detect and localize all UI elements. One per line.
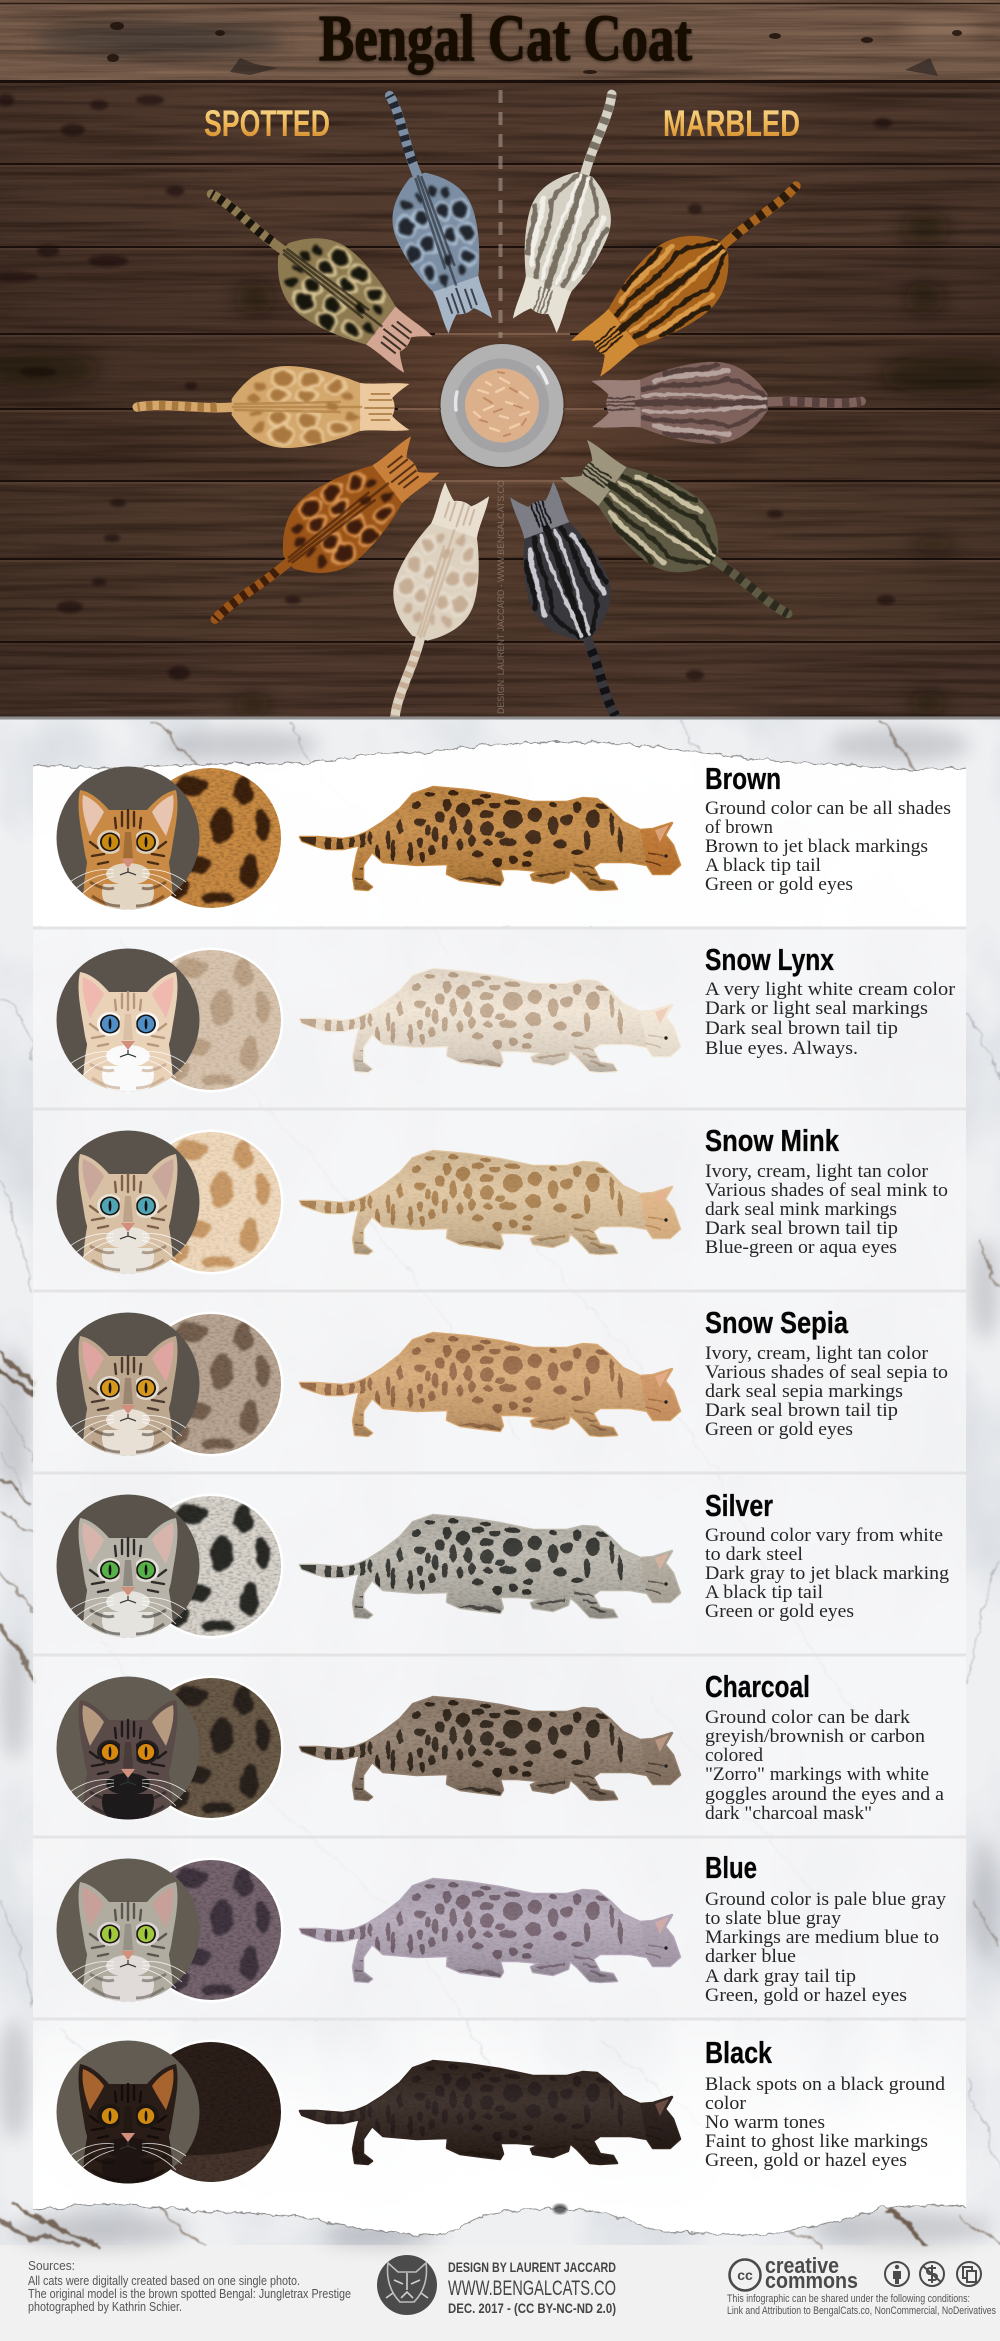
text block: design credit: DESIGN BY LAURENT JACCARD [448,2259,616,2275]
description: Snow Sepia: Various shades of seal sepia to [705,1363,948,1383]
panel: marble background [0,718,1000,2248]
description: Snow Lynx: Dark or light seal markings [705,999,928,1019]
heading: Black: Black [705,2035,773,2070]
panel: Blue coat [56,1850,947,2010]
text block: sources: Sources: [28,2259,75,2273]
description: Blue: to slate blue gray [705,1909,842,1929]
description: Snow Sepia: Dark seal brown tail tip [705,1401,898,1421]
icon: no derivatives [957,2262,981,2286]
description: Charcoal: greyish/brownish or carbon [705,1727,925,1747]
panel: Snow Mink coat [56,1123,948,1282]
cat: top view snow spotted [356,473,507,729]
panel: Silver coat [56,1488,949,1646]
panel: title plank [0,0,1000,82]
portrait: snow mink cat [56,1130,200,1282]
logo: creative commons: commons [765,2268,858,2293]
description: Charcoal: Ground color can be dark [705,1708,911,1728]
description: Charcoal: goggles around the eyes and a [705,1785,944,1805]
text block: license [727,2293,996,2317]
panel: wood table background [0,82,1000,718]
cat: top view snow marbled [495,81,651,342]
panel: Black coat [56,2035,946,2192]
description: Brown: Brown to jet black markings [705,837,928,857]
heading: Charcoal: Charcoal [705,1669,810,1704]
panel: Charcoal coat [56,1669,944,1828]
cat: snow mink side view [295,1147,685,1259]
cat: top view silver spotted [351,82,510,343]
swatch: snow sepia fur [169,1312,284,1456]
icon: noncommercial [920,2262,944,2286]
description: Black: Green, gold or hazel eyes [705,2151,907,2171]
description: Snow Mink: Various shades of seal mink to [705,1181,948,1201]
description: Silver: to dark steel [705,1545,803,1565]
heading: Blue: Blue [705,1850,757,1885]
description: Black: Black spots on a black ground [705,2075,946,2095]
cat: top view mauve marbled [587,360,861,445]
heading: Snow Sepia: Snow Sepia [705,1305,849,1340]
panel: paper sheet [25,742,975,2235]
description: Silver: Green or gold eyes [705,1602,854,1622]
description: Brown: Green or gold eyes [705,875,853,895]
text block: design credit [448,2259,616,2316]
description: Blue: darker blue [705,1947,796,1967]
description: Blue: Green, gold or hazel eyes [705,1986,907,2006]
logo: creative commons: cc [737,2267,753,2283]
heading: marbled: MARBLED [663,103,800,144]
description: Blue: A dark gray tail tip [705,1967,856,1987]
text block: design credit: WWW.BENGALCATS.CO [448,2277,616,2300]
description: Snow Sepia: Green or gold eyes [705,1420,853,1440]
description: Snow Lynx: Blue eyes. Always. [705,1039,858,1059]
portrait: blue cat [56,1858,200,2010]
swatch: brown fur [170,766,281,908]
cat: top view charcoal leopard [186,162,447,389]
cat: black side view [295,2057,685,2169]
text block: design credit: DEC. 2017 - (CC BY-NC-ND 2.0) [448,2300,616,2316]
description: Brown: Ground color can be all shades [705,799,951,819]
swatch: charcoal fur [169,1676,284,1820]
heading: Snow Lynx: Snow Lynx [705,942,835,977]
description: Blue: Ground color is pale blue gray [705,1890,947,1910]
description: Snow Sepia: Ivory, cream, light tan color [705,1344,928,1364]
text block: sources: The original model is the brown spotted Bengal: Jungletrax Prestige [28,2287,351,2301]
description: Silver: A black tip tail [705,1583,823,1603]
description: Snow Lynx: Dark seal brown tail tip [705,1019,898,1039]
description: Snow Mink: dark seal mink markings [705,1200,897,1220]
heading: Snow Mink: Snow Mink [705,1123,840,1158]
swatch: blue fur [138,1858,284,2002]
description: Blue: Markings are medium blue to [705,1928,939,1948]
description: Black: color [705,2094,746,2114]
cat: snow sepia side view [295,1329,685,1441]
description: Charcoal: colored [705,1746,764,1766]
text block: sources: photographed by Kathrin Schier. [28,2300,182,2314]
description: Snow Lynx: A very light white cream color [705,980,955,1000]
heading: Silver: Silver [705,1488,773,1523]
divider line [498,90,502,338]
portrait: brown cat [56,766,200,918]
logo: creative commons [730,2253,858,2293]
portrait: snow lynx cat [56,948,200,1100]
text block: sources: All cats were digitally created based on one single photo. [28,2274,300,2288]
description: Black: Faint to ghost like markings [705,2132,928,2152]
description: Charcoal: dark "charcoal mask" [705,1804,872,1824]
description: Black: No warm tones [705,2113,825,2133]
panel: Brown coat [56,761,951,918]
cat: top view sepia spotted [137,366,414,448]
cat: brown side view [295,783,685,895]
portrait: charcoal cat [56,1676,200,1828]
description: Silver: Ground color vary from white [705,1526,943,1546]
panel: Snow Lynx coat [56,942,955,1100]
swatch: silver fur [169,1494,284,1638]
icon: attribution [885,2262,909,2286]
logo: creative commons: creative [765,2253,839,2278]
footer background [0,2245,1000,2341]
portrait: silver cat [56,1494,200,1646]
swatch: snow mink fur [169,1130,284,1274]
description: Snow Mink: Blue-green or aqua eyes [705,1238,897,1258]
cat: top view brown spotted [190,420,454,651]
cat: top view black marbled [492,472,654,730]
text block: sources [28,2259,351,2314]
swatch: black fur [138,2040,284,2184]
title: Bengal Cat Coat [319,2,692,75]
cat: charcoal side view [295,1693,685,1805]
cat: silver side view [295,1511,685,1623]
cat: top view brown marbled [556,154,822,393]
credit text: vertical: DESIGN: LAURENT JACCARD - WWW.BENGALCATS.CO [496,480,506,714]
description: Silver: Dark gray to jet black marking [705,1564,949,1584]
panel: Snow Sepia coat [56,1305,948,1464]
description: Snow Sepia: dark seal sepia markings [705,1382,903,1402]
description: Snow Mink: Dark seal brown tail tip [705,1219,898,1239]
icon: cat logo [377,2255,437,2315]
portrait: black cat [56,2040,200,2192]
description: Snow Mink: Ivory, cream, light tan color [705,1162,928,1182]
heading: spotted: SPOTTED [204,103,330,144]
cat: blue side view [295,1875,685,1987]
description: Charcoal: "Zorro" markings with white [705,1765,929,1785]
portrait: snow sepia cat [56,1312,200,1464]
cat: top view olive marbled [546,423,812,647]
swatch: snow lynx fur [169,948,284,1092]
icon: food bowl [440,344,564,467]
cat: snow lynx side view [295,965,685,1077]
description: Brown: A black tip tail [705,856,821,876]
description: Brown: of brown [705,818,773,838]
heading: Brown: Brown [705,761,781,796]
